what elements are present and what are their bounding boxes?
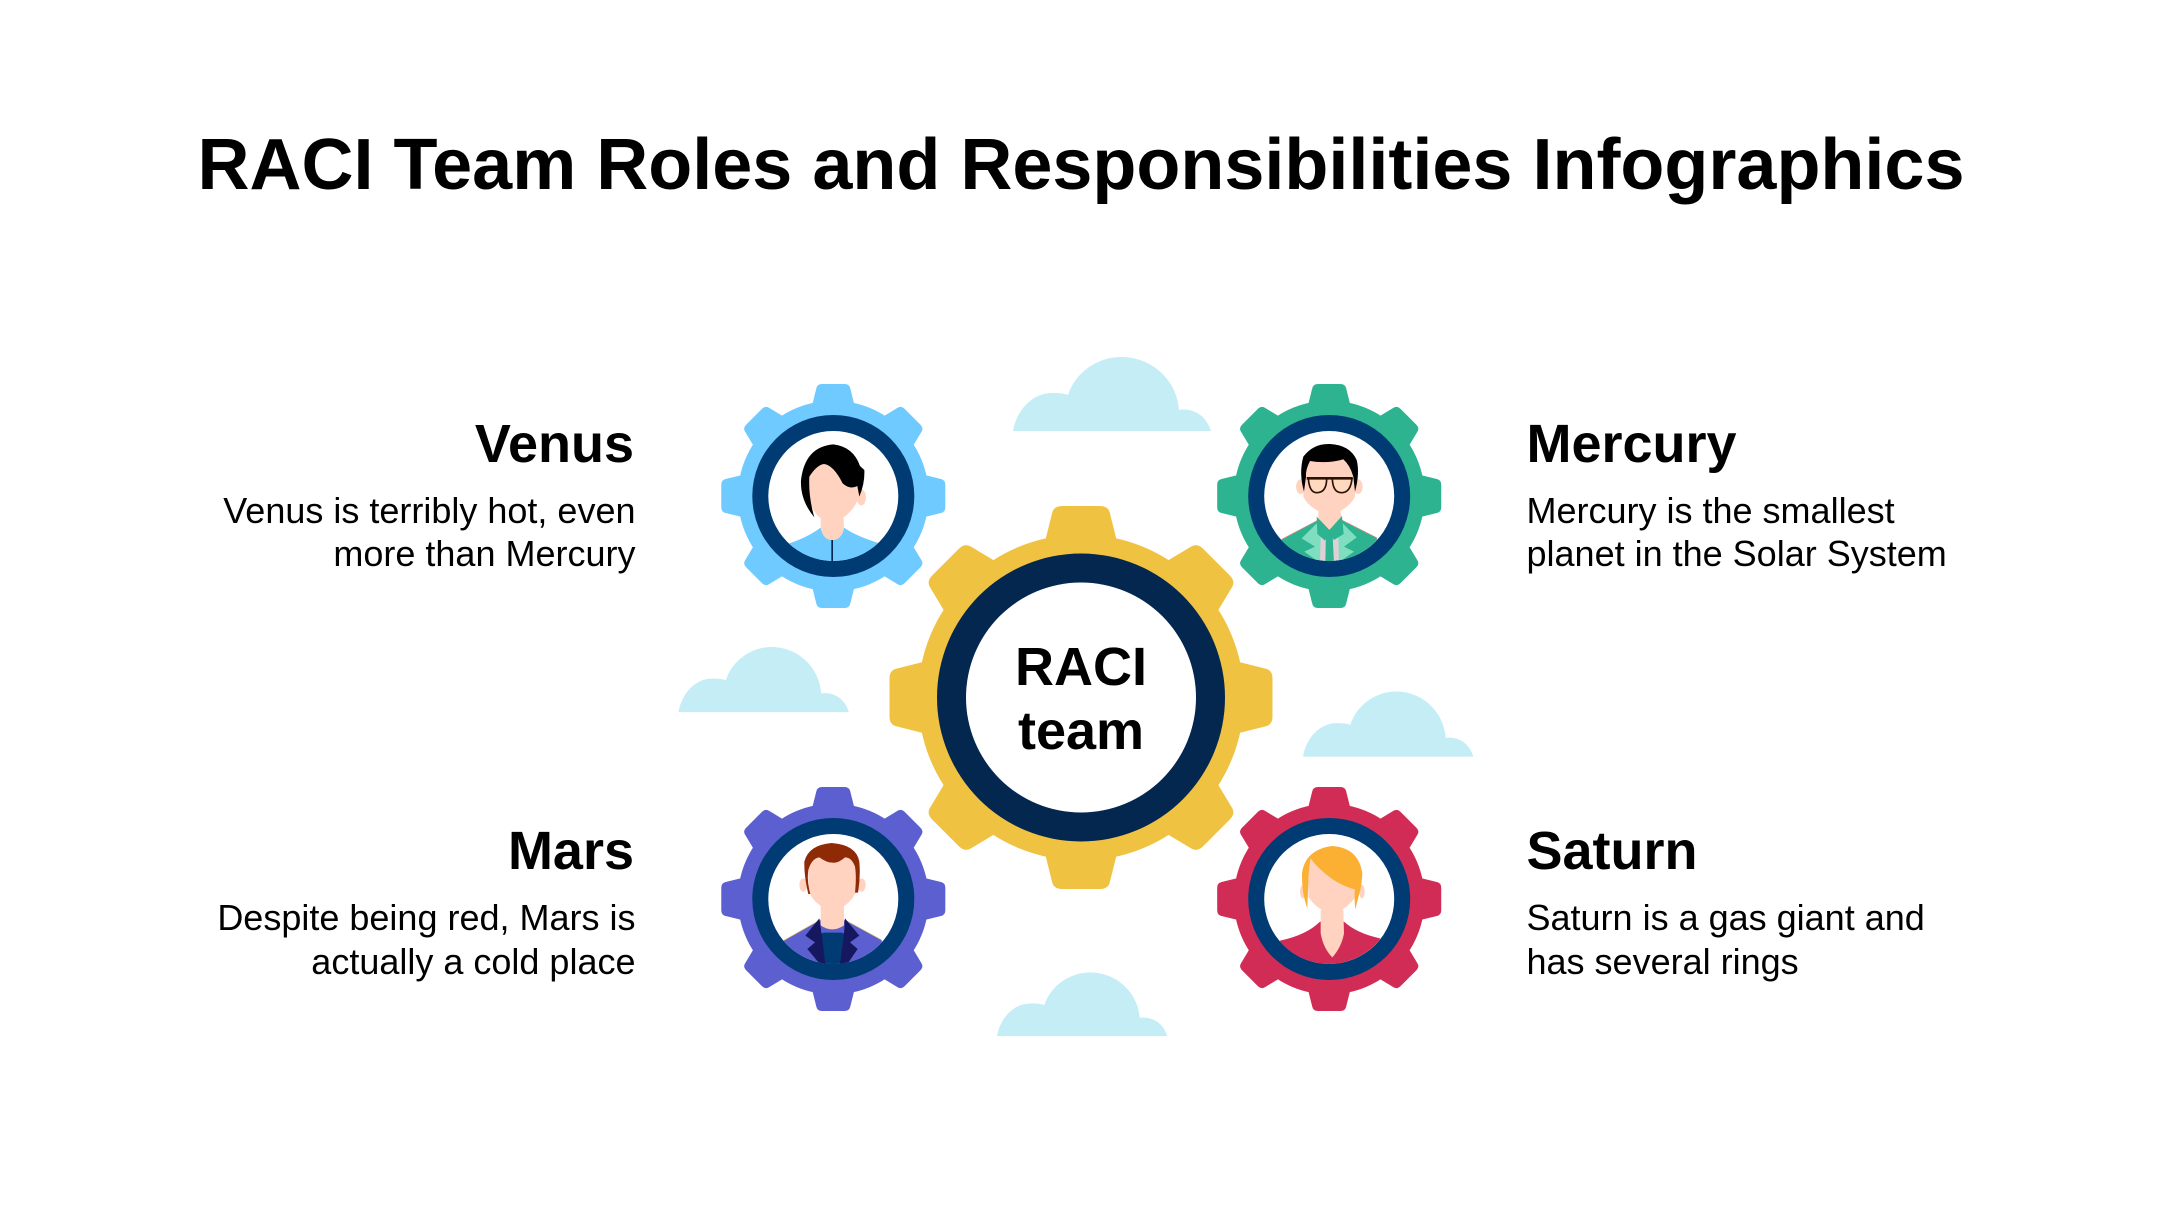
icon: Mars person	[783, 843, 882, 964]
gear: Mercury	[1217, 384, 1441, 608]
icon: Venus person	[789, 444, 878, 561]
text block: Saturn: has several rings	[1526, 941, 1799, 982]
central label	[1015, 637, 1147, 761]
central label: RACI	[1015, 637, 1147, 697]
text block: Mercury: planet in the Solar System	[1526, 533, 1947, 574]
text block: Mars: Despite being red, Mars is	[217, 897, 636, 938]
icon: Mercury person	[1281, 444, 1378, 561]
gear: Saturn	[1217, 787, 1441, 1011]
title: RACI Team Roles and Responsibilities Infographics	[198, 125, 1964, 205]
text block: Saturn: Saturn	[1526, 821, 1698, 881]
text block: Venus: Venus is terribly hot, even	[223, 490, 636, 531]
gear: Mars	[721, 787, 945, 1011]
text block: Saturn	[1526, 821, 1925, 982]
text block: Mars	[217, 821, 636, 982]
central label: team	[1018, 701, 1144, 761]
text block: Venus: more than Mercury	[333, 533, 636, 574]
icon: cloud bottom	[997, 972, 1167, 1036]
text block: Saturn: Saturn is a gas giant and	[1526, 897, 1925, 938]
text block: Mercury: Mercury is the smallest	[1526, 490, 1895, 531]
text block: Venus: Venus	[475, 414, 634, 474]
central gear	[890, 506, 1272, 889]
icon: cloud left	[678, 647, 849, 712]
text block: Mercury: Mercury	[1526, 414, 1737, 474]
icon: Saturn person	[1280, 846, 1380, 964]
gear: Venus	[721, 384, 945, 608]
text block: Mercury	[1526, 414, 1947, 574]
text block: Mars: Mars	[508, 821, 634, 881]
text block: Mars: actually a cold place	[311, 941, 636, 982]
text block: Venus	[223, 414, 636, 574]
icon: cloud top	[1013, 357, 1211, 431]
icon: cloud right	[1303, 692, 1473, 757]
